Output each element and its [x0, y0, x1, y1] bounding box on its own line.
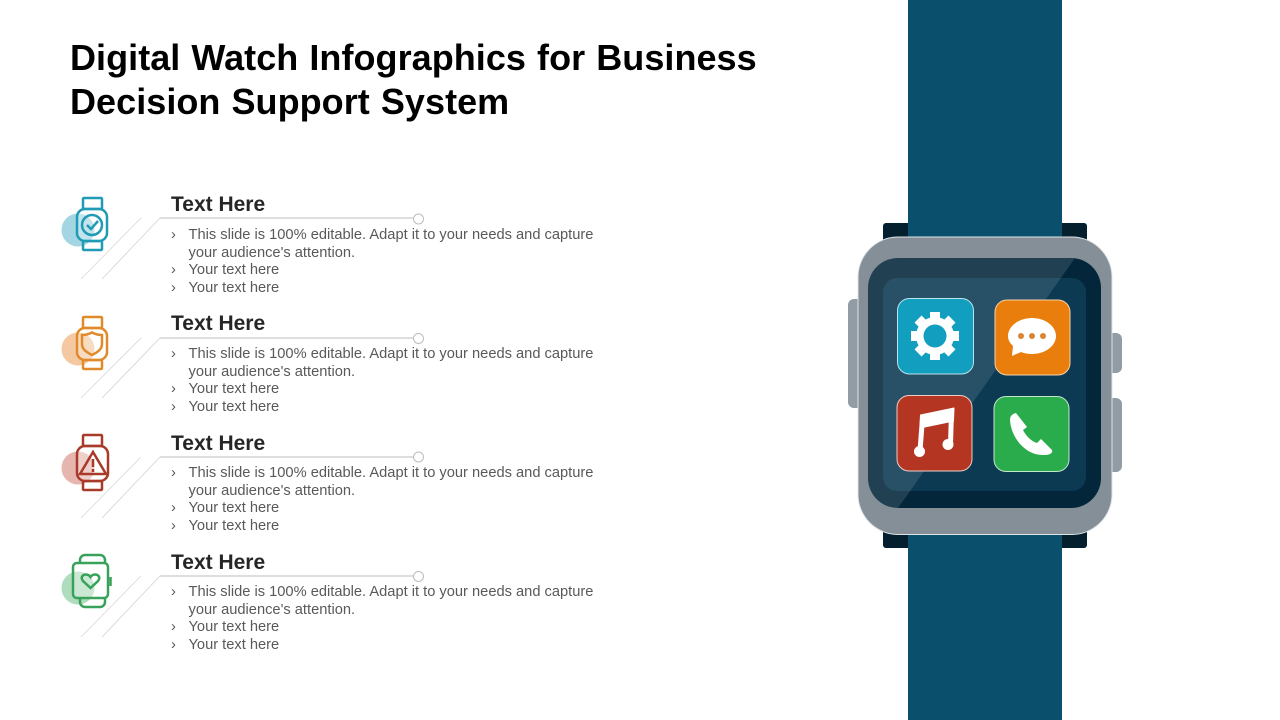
bullet list: This slide is 100% editable. Adapt it to your needs and capture [188, 346, 593, 362]
panel: item 3 [62, 432, 593, 534]
app icon: music note [897, 396, 972, 471]
bullet list: › [171, 381, 176, 397]
panel: item 2 [62, 312, 593, 415]
icon: watch with warning triangle [62, 434, 424, 518]
heading: Text Here [171, 193, 265, 216]
bullet list: › [171, 346, 176, 362]
dark strap lugs [883, 223, 1087, 548]
bullet list: › [171, 619, 176, 635]
heading: Text Here [171, 312, 265, 335]
watch screen [860, 258, 1101, 508]
bullet list: › [171, 500, 176, 516]
bullet list: › [171, 262, 176, 278]
bullet list: › [171, 637, 176, 653]
smartwatch illustration [848, 0, 1122, 720]
bullet list: your audience's attention. [188, 483, 355, 499]
icon: watch with heart [62, 554, 424, 638]
bullet list: This slide is 100% editable. Adapt it to your needs and capture [188, 584, 593, 600]
bullet list [171, 346, 593, 415]
title [70, 37, 757, 122]
panel: item 1 [62, 193, 593, 296]
bullet list [171, 227, 593, 296]
title: Digital Watch Infographics for Business [70, 37, 757, 78]
bullet list: › [171, 584, 176, 600]
heading: Text Here [171, 432, 265, 455]
bullet list: Your text here [188, 637, 279, 653]
bullet list: › [171, 518, 176, 534]
bullet list [171, 584, 593, 653]
bullet list: Your text here [188, 518, 279, 534]
heading: Text Here [171, 551, 265, 574]
bullet list: This slide is 100% editable. Adapt it to your needs and capture [188, 227, 593, 243]
bullet list: Your text here [188, 500, 279, 516]
app icon: phone [994, 396, 1069, 472]
icon: watch with check mark [62, 196, 424, 280]
bullet list: This slide is 100% editable. Adapt it to your needs and capture [188, 465, 593, 481]
title: Decision Support System [70, 81, 509, 122]
side buttons [848, 299, 1122, 472]
watch strap [908, 0, 1062, 720]
bullet list: Your text here [188, 619, 279, 635]
bullet list [171, 465, 593, 534]
bullet list: Your text here [188, 280, 279, 296]
bullet list: your audience's attention. [188, 364, 355, 380]
app icon: settings gear [898, 298, 974, 374]
bullet list: Your text here [188, 381, 279, 397]
bullet list: Your text here [188, 399, 279, 415]
panel: item 4 [62, 551, 593, 653]
bullet list: your audience's attention. [188, 245, 355, 261]
watch case [858, 237, 1112, 534]
bullet list: › [171, 399, 176, 415]
bullet list: your audience's attention. [188, 602, 355, 618]
bullet list: Your text here [188, 262, 279, 278]
bullet list: › [171, 465, 176, 481]
bullet list: › [171, 227, 176, 243]
bullet list: › [171, 280, 176, 296]
app icon: chat bubble [995, 300, 1070, 375]
icon: watch with shield [62, 316, 424, 398]
